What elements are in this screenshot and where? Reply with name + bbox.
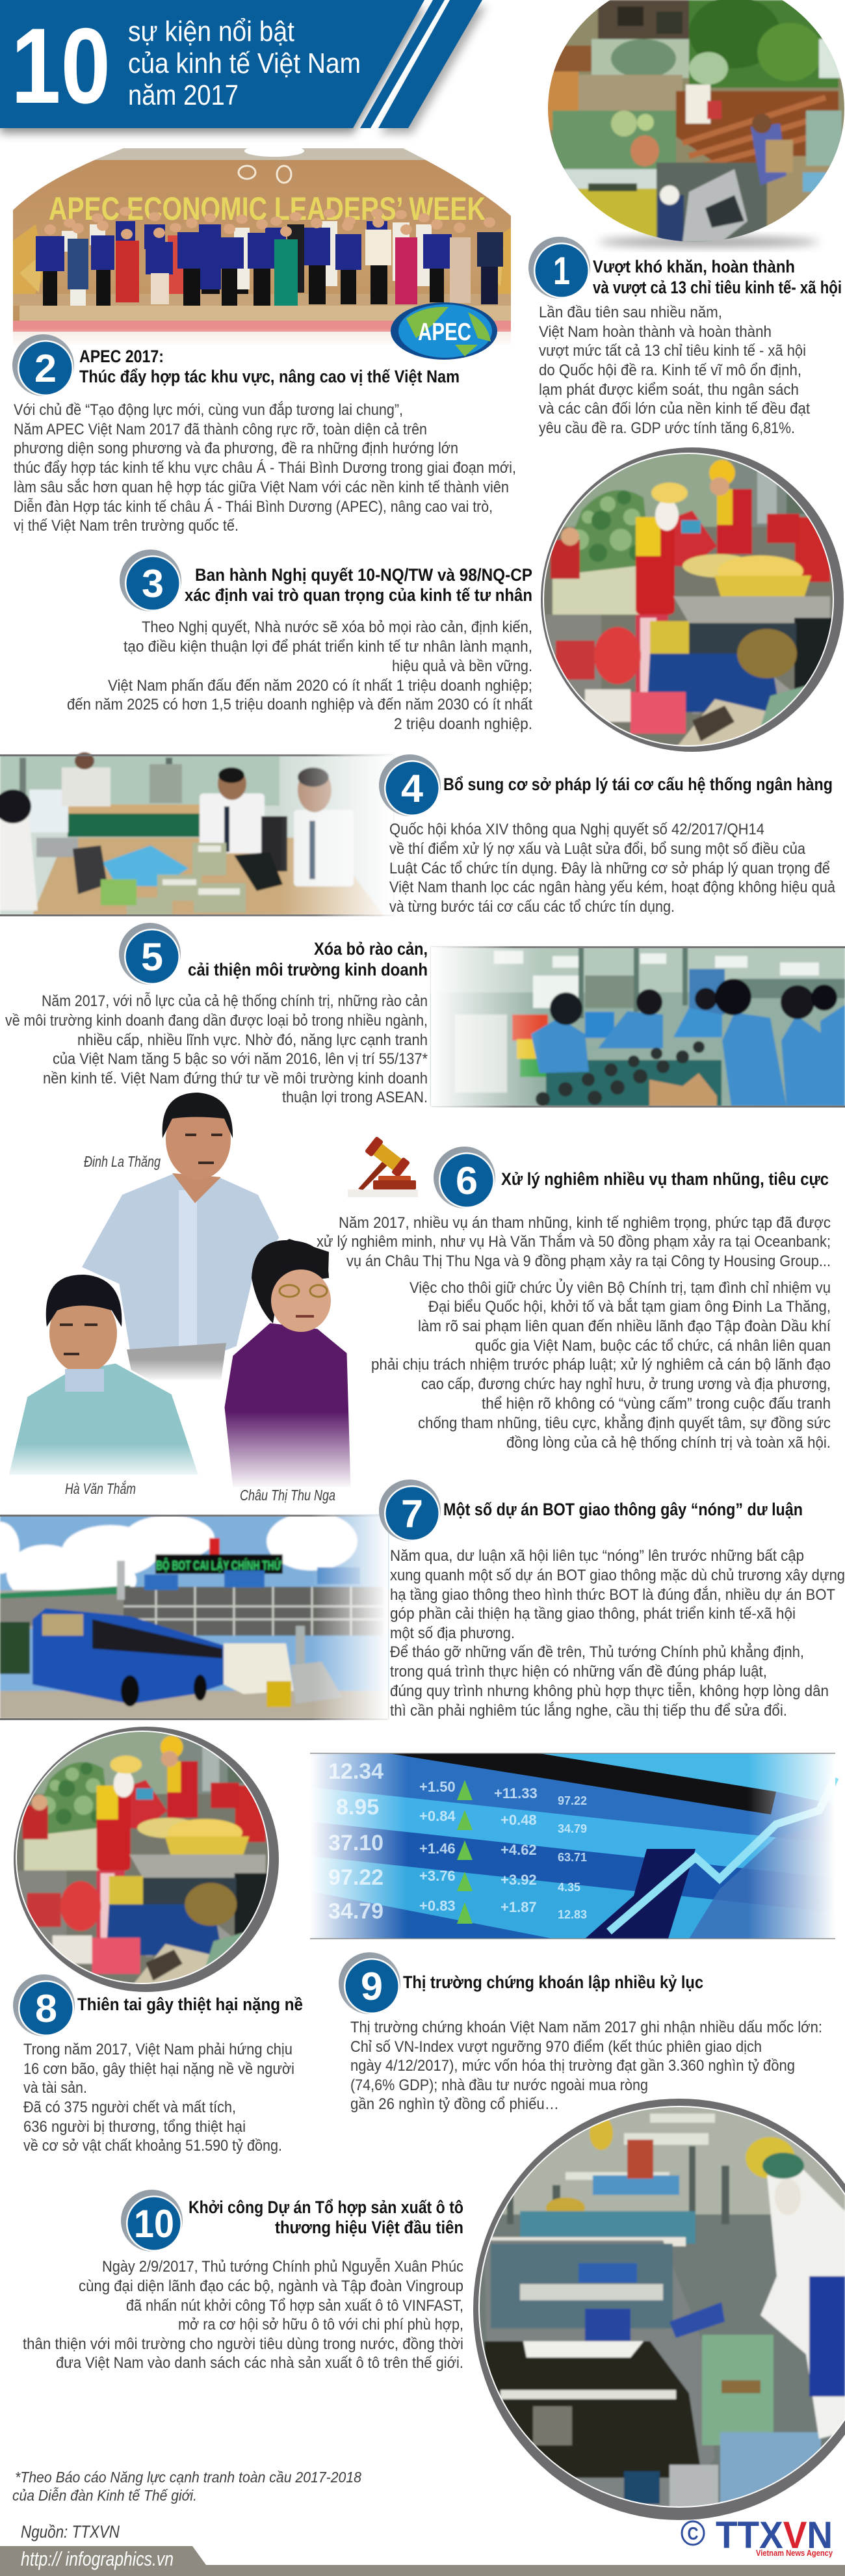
photo: Hà Văn Thắm <box>0 1275 208 1480</box>
body 9: gần 26 nghìn tỷ đồng cổ phiếu… <box>350 2095 559 2113</box>
body 4: Quốc hội khóa XIV thông qua Nghị quyết số 42/2017/QH14 <box>389 821 764 838</box>
board numbers: 12.83 <box>558 1908 587 1921</box>
board numbers: 12.34 <box>328 1759 384 1784</box>
board numbers: 4.35 <box>558 1881 580 1894</box>
body 1: Lần đầu tiên sau nhiều năm, <box>539 304 722 321</box>
body 5 <box>5 992 428 1106</box>
badge 5 <box>119 923 181 985</box>
badge 8: 8 <box>35 1987 57 2030</box>
label: Đinh La Thăng: Đinh La Thăng <box>84 1153 161 1170</box>
photo: stock market board <box>310 1753 835 1939</box>
event 5 <box>5 923 428 1106</box>
body 5: nhiều cấp, nhiều lĩnh vực. Nhờ đó, năng lực cạnh tranh <box>77 1031 428 1049</box>
badge 4: 4 <box>401 767 424 810</box>
logo: TTXVN: C <box>688 2523 698 2543</box>
badge 10 <box>121 2190 183 2251</box>
body 2: phương diện song phương và đa phương, đề ra những định hướng lớn <box>14 440 458 457</box>
body 10: mở ra cơ hội sở hữu ô tô với chi phí phù hợp, <box>178 2316 463 2333</box>
body 2: Với chủ đề “Tạo động lực mới, cùng vun đắp tương lai chung”, <box>14 401 403 419</box>
badge 4 <box>379 754 441 816</box>
title text <box>128 16 361 111</box>
label: Châu Thị Thu Nga: Châu Thị Thu Nga <box>240 1487 335 1504</box>
body 10: cùng đại diện lãnh đạo các bộ, ngành và Tập đoàn Vingroup <box>79 2277 463 2295</box>
icon: gavel <box>348 1136 418 1197</box>
badge 5: 5 <box>141 935 163 979</box>
body 7: thì cần phải nghiêm túc lắng nghe, cầu thị tiếp thu để sửa đổi. <box>390 1702 787 1720</box>
photo: bank tellers <box>0 752 393 916</box>
body 3: 2 triệu doanh nghiệp. <box>394 715 532 733</box>
body 8: Đã có 375 người chết và mất tích, <box>23 2099 236 2116</box>
body 9: (74,6% GDP); nhà đầu tư nước ngoài mua ròng <box>350 2077 648 2094</box>
heading 3: Ban hành Nghị quyết 10-NQ/TW và 98/NQ-CP <box>195 565 532 585</box>
photo: Châu Thị Thu Nga <box>224 1239 354 1489</box>
event 4 <box>379 754 835 916</box>
board numbers: 97.22 <box>328 1865 384 1890</box>
event 9 <box>339 1952 822 2113</box>
body 2: Năm APEC Việt Nam 2017 đã thành công rực rỡ, toàn diện cả trên <box>14 421 427 438</box>
body 7: Năm qua, dư luận xã hội liên tục “nóng” lên trước những bất cập <box>390 1547 804 1565</box>
badge 1: 1 <box>553 249 570 293</box>
heading 5: cải thiện môi trường kinh doanh <box>188 960 428 979</box>
heading 2: APEC 2017: <box>79 347 164 366</box>
badge 10: 10 <box>134 2202 174 2246</box>
photo: car factory circle <box>473 2099 845 2520</box>
footnote <box>12 2469 361 2504</box>
body 2: thúc đẩy hợp tác kinh tế khu vực châu Á - Thái Bình Dương trong giai đoạn mới, <box>14 459 516 477</box>
body 1: và các cân đối lớn của nền kinh tế đều đạt <box>539 400 810 418</box>
event 2 <box>12 334 516 535</box>
label: Hà Văn Thắm: Hà Văn Thắm <box>65 1480 136 1497</box>
body 9: Chỉ số VN-Index vượt ngưỡng 970 điểm (kết thúc phiên giao dịch <box>350 2038 762 2056</box>
event 7 <box>379 1480 845 1720</box>
body 2: làm sâu sắc hơn quan hệ hợp tác giữa Việt Nam với các nền kinh tế thành viên <box>14 479 509 496</box>
title banner <box>0 0 486 133</box>
footer bar <box>0 2546 845 2576</box>
badge 1 <box>528 237 590 299</box>
body 8 <box>23 2041 294 2155</box>
board numbers: 37.10 <box>328 1831 384 1855</box>
body 5: về môi trường kinh doanh đang dần được loại bỏ trong nhiều ngành, <box>5 1012 428 1029</box>
body 4: về thí điểm xử lý nợ xấu và Luật sửa đổi, bổ sung một số điều của <box>389 840 805 858</box>
board numbers: 63.71 <box>558 1851 587 1864</box>
title text: của kinh tế Việt Nam <box>128 47 361 79</box>
board numbers: +0.48 <box>500 1812 537 1828</box>
body 3: hiệu quả và bền vững. <box>392 657 532 675</box>
badge 6 <box>434 1147 495 1208</box>
badge 3: 3 <box>142 562 164 605</box>
body 7: một số địa phương. <box>390 1625 515 1642</box>
body 10: thân thiện với môi trường cho người tiêu dùng trong nước, đồng thời <box>23 2335 463 2353</box>
body 5: Năm 2017, với nỗ lực của cả hệ thống chính trị, những rào cản <box>42 992 428 1010</box>
heading 1: Vượt khó khăn, hoàn thành <box>593 257 795 276</box>
event 8 <box>13 1974 303 2155</box>
body 9 <box>350 2019 822 2113</box>
body 2: vị thế Việt Nam trên trường quốc tế. <box>14 517 239 535</box>
event 3 <box>67 550 532 733</box>
logo: TTXVN: TTXVN <box>716 2514 833 2556</box>
backdrop slogan: APEC ECONOMIC LEADERS’ WEEK <box>49 191 486 227</box>
badge 8 <box>13 1974 75 2036</box>
body 1: do Quốc hội đề ra. Kinh tế vĩ mô ổn định, <box>539 362 801 379</box>
board numbers: +3.92 <box>500 1872 537 1888</box>
body 5: của Việt Nam tăng 5 bậc so với năm 2016, lên vị trí 55/137* <box>53 1050 428 1068</box>
body 7: Để tháo gỡ những vấn đề trên, Thủ tướng Chính phủ khẳng định, <box>390 1642 804 1661</box>
board numbers: +0.83 <box>419 1898 456 1914</box>
body 10: Ngày 2/9/2017, Thủ tướng Chính phủ Nguyễn Xuân Phúc <box>102 2258 463 2276</box>
body 3: tạo điều kiện thuận lợi để phát triển kinh tế tư nhân lành mạnh, <box>124 638 532 656</box>
badge 3 <box>120 550 181 611</box>
board numbers: +3.76 <box>419 1868 456 1884</box>
photo: factory workers <box>431 946 845 1108</box>
title number: 10 <box>11 6 110 126</box>
body 6 <box>317 1214 831 1452</box>
body 1: vượt mức tất cả 13 chỉ tiêu kinh tế - xã hội <box>539 342 806 360</box>
body 9: ngày 4/12/2017), mức vốn hóa thị trường đạt gần 3.360 nghìn tỷ đồng <box>350 2057 795 2075</box>
website link: http:// infographics.vn <box>21 2547 174 2570</box>
heading 3: xác định vai trò quan trọng của kinh tế tư nhân <box>185 585 532 605</box>
board numbers: +11.33 <box>494 1785 538 1801</box>
body 7 <box>390 1547 845 1720</box>
photo: workers circle (storm section) <box>14 1727 279 1992</box>
source: Nguồn: TTXVN <box>21 2522 120 2542</box>
body 3 <box>67 618 532 733</box>
icon: APEC globe logo <box>391 302 497 360</box>
heading 2: Thúc đẩy hợp tác khu vực, nâng cao vị thế Việt Nam <box>79 367 460 386</box>
badge 2: 2 <box>34 347 57 390</box>
event 6 <box>317 1147 831 1452</box>
badge 2 <box>12 334 74 396</box>
badge 7 <box>379 1480 441 1541</box>
photo: workers circle <box>541 447 844 752</box>
footnote: của Diễn đàn Kinh tế Thế giới. <box>12 2486 197 2504</box>
heading 10 <box>188 2198 463 2237</box>
board numbers: +1.50 <box>419 1779 456 1795</box>
photo: BOT toll station <box>0 1512 388 1720</box>
body 8: Trong năm 2017, Việt Nam phải hứng chịu <box>23 2041 292 2058</box>
body 4 <box>389 821 835 916</box>
body 10 <box>23 2258 463 2372</box>
heading 9: Thị trường chứng khoán lập nhiều kỷ lục <box>403 1972 703 1992</box>
board numbers: +4.62 <box>500 1842 537 1858</box>
body 2 <box>14 401 516 535</box>
board numbers: 97.22 <box>558 1794 587 1807</box>
body 1 <box>539 304 810 437</box>
body 8: 16 cơn bão, gây thiệt hại nặng nề về người <box>23 2060 294 2078</box>
globe label: APEC <box>418 319 471 346</box>
body 5: nền kinh tế. Việt Nam đứng thứ tư về môi trường kinh doanh <box>43 1070 428 1087</box>
title text: sự kiện nổi bật <box>128 16 294 47</box>
board numbers <box>328 1759 587 1924</box>
logo: TTXVN: Vietnam News Agency <box>756 2548 833 2558</box>
body 3: Theo Nghị quyết, Nhà nước sẽ xóa bỏ mọi rào cản, định kiến, <box>142 618 532 636</box>
badge 9 <box>339 1952 400 2014</box>
heading 5: Xóa bỏ rào cản, <box>314 939 428 959</box>
badge 9: 9 <box>361 1965 383 2008</box>
photo: APEC leaders <box>0 145 520 348</box>
heading 1 <box>593 257 842 297</box>
board numbers: 34.79 <box>558 1822 587 1835</box>
heading 5 <box>188 939 428 979</box>
heading 3 <box>185 565 532 605</box>
body 8: 636 người bị thương, tổng thiệt hại <box>23 2118 246 2136</box>
board numbers: +1.46 <box>419 1840 456 1857</box>
title text: năm 2017 <box>128 79 239 111</box>
board numbers: 34.79 <box>328 1899 384 1924</box>
body 7: góp phần cải thiện hạ tầng giao thông, phát triển kinh tế-xã hội <box>390 1605 796 1623</box>
heading 2 <box>79 347 460 386</box>
event 1 <box>528 237 842 437</box>
body 1: yêu cầu đề ra. GDP ước tính tăng 6,81%. <box>539 419 795 437</box>
body 5: thuận lợi trong ASEAN. <box>282 1089 428 1106</box>
heading 10: thương hiệu Việt đầu tiên <box>275 2218 463 2237</box>
body 3: Việt Nam phấn đấu đến năm 2020 có ít nhất 1 triệu doanh nghiệp; <box>108 677 532 695</box>
body 7: trong quá trình thực hiện có những vấn đề đúng pháp luật, <box>390 1663 767 1680</box>
badge 6: 6 <box>456 1159 478 1202</box>
photo: farm collage circle <box>546 0 845 247</box>
body 2: Diễn đàn Hợp tác kinh tế châu Á - Thái Bình Dương (APEC), nâng cao vai trò, <box>14 498 493 516</box>
board numbers: 8.95 <box>336 1795 379 1820</box>
body 3: đến năm 2025 có hơn 1,5 triệu doanh nghiệp và đến năm 2030 có ít nhất <box>67 696 532 713</box>
badge 7: 7 <box>401 1492 423 1535</box>
body 8: và tài sản. <box>23 2079 87 2097</box>
footnote: *Theo Báo cáo Năng lực cạnh tranh toàn cầu 2017-2018 <box>15 2469 361 2486</box>
heading 10: Khởi công Dự án Tổ hợp sản xuất ô tô <box>188 2198 463 2217</box>
heading 8: Thiên tai gây thiệt hại nặng nề <box>77 1995 303 2014</box>
toll sign text: BỘ BOT CAI LẬY CHÍNH THỨ <box>156 1558 281 1573</box>
body 8: về cơ sở vật chất khoảng 51.590 tỷ đồng. <box>23 2137 282 2155</box>
event 10 <box>23 2190 463 2372</box>
board numbers: +0.84 <box>419 1808 456 1824</box>
board numbers: +1.87 <box>500 1899 537 1915</box>
body 1: lạm phát được kiểm soát, thu ngân sách <box>539 381 799 399</box>
body 10: đã nhấn nút khởi công Tổ hợp sản xuất ô tô VINFAST, <box>126 2297 463 2315</box>
body 10: đưa Việt Nam vào danh sách các nhà sản xuất ô tô trên thế giới. <box>56 2354 463 2372</box>
body 1: Việt Nam hoàn thành và hoàn thành <box>539 323 772 341</box>
body 4: và từng bước tái cơ cấu các tổ chức tín dụng. <box>389 898 675 916</box>
photo: Đinh La Thăng <box>81 1093 280 1382</box>
